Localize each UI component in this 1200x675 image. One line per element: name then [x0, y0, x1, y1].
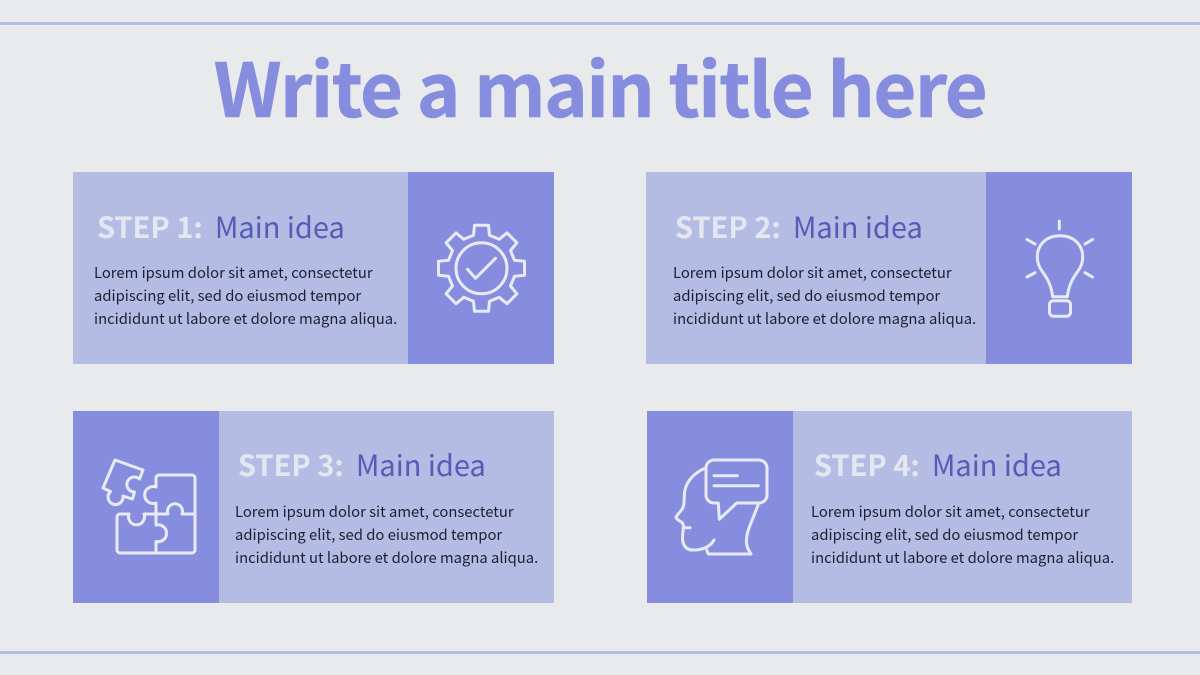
icon: puzzle pieces	[102, 458, 196, 554]
step 1 icon box	[408, 172, 554, 364]
step 1 heading: STEP 1: Main idea	[97, 205, 345, 247]
step 1 body text: Lorem ipsum dolor sit amet, consectetur	[94, 262, 373, 283]
step 1 body text: incididunt ut labore et dolore magna aliqua.	[94, 308, 397, 329]
top rule	[0, 22, 1200, 25]
step 3 body text: incididunt ut labore et dolore magna aliqua.	[235, 547, 538, 568]
panel: step 4	[647, 411, 1132, 603]
panel: step 2	[646, 172, 1132, 364]
step 2 body text: Lorem ipsum dolor sit amet, consectetur	[673, 262, 952, 283]
step 1 body text: adipiscing elit, sed do eiusmod tempor	[94, 285, 361, 306]
step 3 body text	[235, 501, 538, 568]
step 4 body text: incididunt ut labore et dolore magna aliqua.	[811, 547, 1114, 568]
step 3 icon box	[73, 411, 219, 603]
step 2 body text	[673, 262, 976, 329]
icon: light bulb	[1026, 220, 1094, 318]
step 4 icon box	[647, 411, 793, 603]
title: Write a main title here	[214, 32, 986, 139]
step 2 icon box	[986, 172, 1132, 364]
step 3 body text: Lorem ipsum dolor sit amet, consectetur	[235, 501, 514, 522]
step 4 body text	[811, 501, 1114, 568]
step 1 body text	[94, 262, 397, 329]
step 2 body text: adipiscing elit, sed do eiusmod tempor	[673, 285, 940, 306]
step 3 heading: STEP 3: Main idea	[238, 443, 486, 485]
step 2 heading: STEP 2: Main idea	[675, 205, 923, 247]
panel: step 1	[73, 172, 554, 364]
step 2 body text: incididunt ut labore et dolore magna aliqua.	[673, 308, 976, 329]
step 4 body text: Lorem ipsum dolor sit amet, consectetur	[811, 501, 1090, 522]
step 3 body text: adipiscing elit, sed do eiusmod tempor	[235, 524, 502, 545]
step 4 heading: STEP 4: Main idea	[814, 443, 1062, 485]
icon: gear with check	[437, 224, 526, 313]
step 4 body text: adipiscing elit, sed do eiusmod tempor	[811, 524, 1078, 545]
panel: step 3	[73, 411, 554, 603]
icon: head with speech bubble	[674, 458, 768, 556]
bottom rule	[0, 651, 1200, 654]
